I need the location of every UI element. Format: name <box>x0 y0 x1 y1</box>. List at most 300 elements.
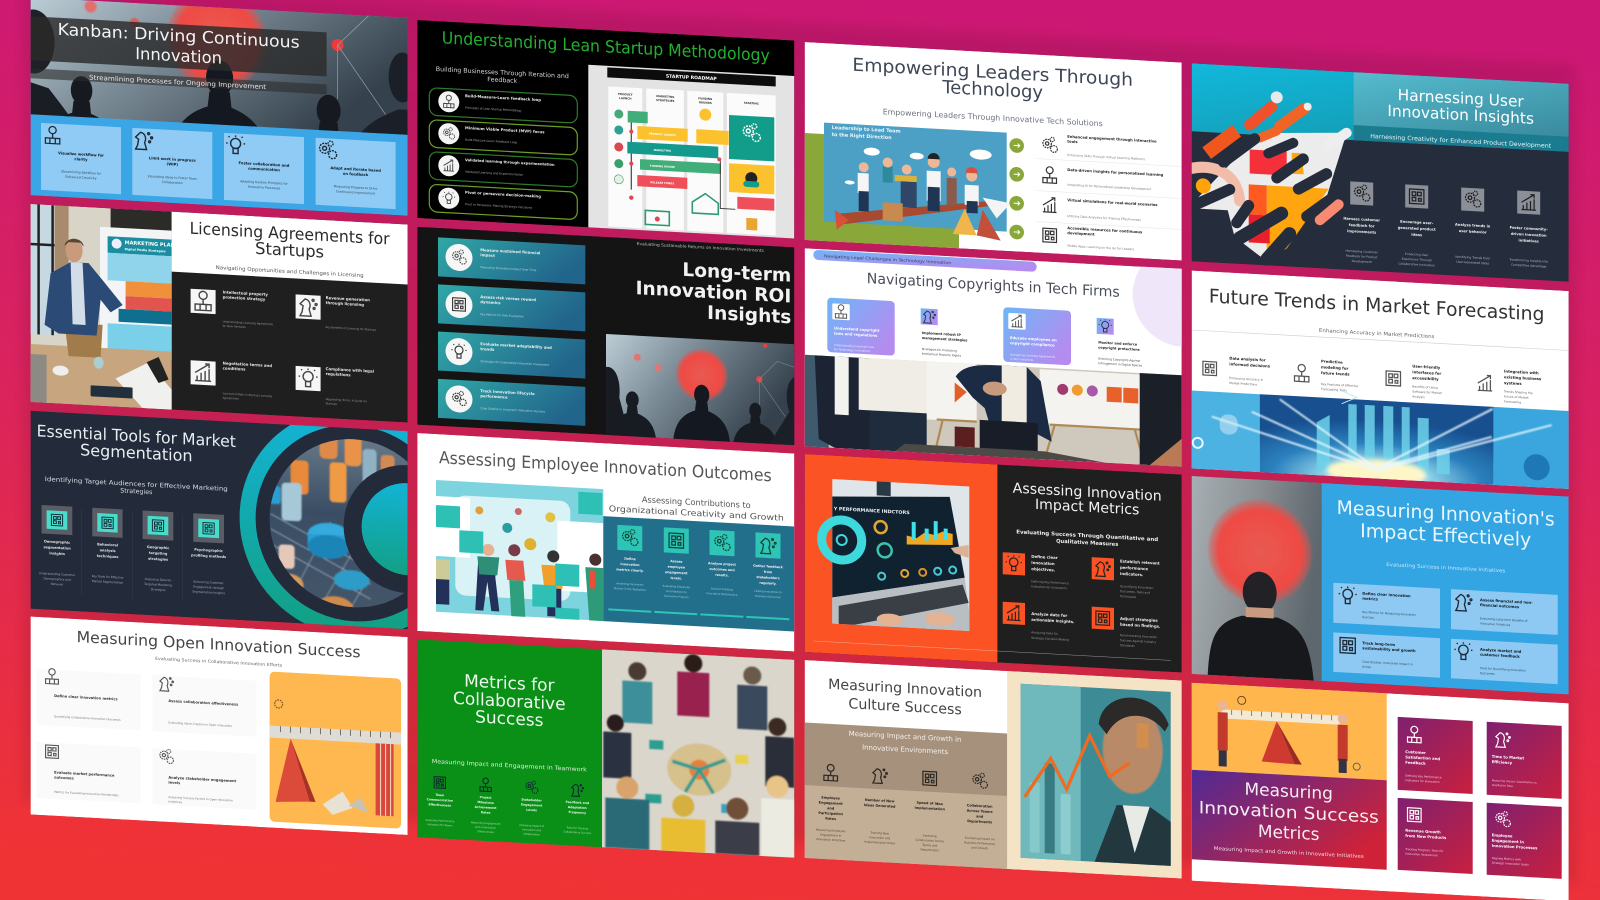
metric: feedback frequency: Collaborative Success <box>564 830 592 835</box>
title: Innovation ROI <box>636 278 791 308</box>
title: Navigating Copyrights in Tech Firms <box>867 271 1120 301</box>
card: educate employees: Educate employees on <box>1010 336 1057 343</box>
item: adjust strategies: Success Against Industry <box>1120 638 1156 644</box>
slide: Licensing Agreements for Startups <box>31 204 408 423</box>
item: accessible resources: Accessible resources for continuous <box>1067 226 1143 234</box>
tool: demographic: Demographics and <box>43 576 71 582</box>
item: define objectives: Defining Key Performance <box>1031 579 1069 585</box>
item: interactive tools: Enhanced engagement through interactive <box>1067 135 1157 144</box>
tool: psychographic: Engagement through <box>193 585 224 590</box>
item: integration: Trends Shaping the <box>1503 389 1533 395</box>
card: adapt and iterate <box>316 138 396 209</box>
lower tan panel <box>805 785 1007 869</box>
photo: analytics pegs in circle <box>266 425 446 626</box>
subtitle: Empowering Leaders Through Innovative Tech Solutions <box>883 107 1103 128</box>
slide: Measuring Innovation Success Metrics <box>1192 683 1569 900</box>
column: foster community: Foster community- <box>1510 226 1548 232</box>
item: interactive tools <box>1042 135 1156 160</box>
item: risk vs reward: dynamics <box>480 299 501 305</box>
metric: project milestone: Rates <box>481 810 491 815</box>
box: sustainability: Action <box>1362 665 1372 669</box>
tile: customer satisfaction: Customer <box>1405 749 1426 755</box>
column: encourage ideas: Encourage user- <box>1400 220 1434 225</box>
tool: demographic: insights <box>49 551 65 556</box>
metric: define: Metrics in the Workplace <box>614 586 646 592</box>
item: adjust strategies: Benchmarking Innovation <box>1120 633 1157 639</box>
metric: team communication: Effectiveness <box>429 802 451 808</box>
item: data-driven insights: Data-driven insights for personalized learning <box>1067 168 1164 177</box>
box: financial outcomes: Innovative Initiatives <box>1480 621 1511 627</box>
startup roadmap board: PRODUCT <box>618 92 633 97</box>
column: encourage ideas: Collaborative Innovation <box>1398 262 1435 268</box>
item: accessible resources: development <box>1067 231 1095 237</box>
item: compliance: regulations <box>326 371 351 377</box>
metric: new ideas: Tracking New <box>869 831 890 836</box>
subtitle: Navigating Opportunities and Challenges in Licensing <box>216 265 364 279</box>
title: Assessing Employee Innovation Outcomes <box>439 447 772 485</box>
startup roadmap board: FUNDING <box>698 96 712 101</box>
item: risk vs reward <box>438 284 585 331</box>
list item 2 <box>429 120 577 155</box>
list item 1: Principles of Lean Startup Methodology <box>465 106 522 113</box>
box: financial outcomes: financial outcomes <box>1480 603 1520 609</box>
box: market feedback: Outcomes <box>1480 671 1495 676</box>
column: analyze trends: Analyze trends in <box>1455 223 1491 229</box>
metric: assess <box>663 527 690 599</box>
arrow bullet 3 <box>1009 196 1024 211</box>
title: Understanding Lean Startup Methodology <box>442 27 770 65</box>
startup roadmap board: RELEASE FUNDS <box>650 180 674 185</box>
list item 3: Validated Learning and Experimentation <box>465 170 523 177</box>
item: integration: Integration with <box>1504 368 1539 375</box>
item: predictive modeling: Forecasting Tools <box>1321 387 1347 392</box>
metric: analyze <box>707 530 738 597</box>
tool: demographic: Understanding Customer <box>39 571 76 577</box>
subtitle: Measuring Impact and Growth in Innovative Initiatives <box>1214 846 1364 860</box>
tile: customer satisfaction <box>1398 717 1473 794</box>
metric: stakeholder engagement: Levels <box>526 808 537 812</box>
item: IP strategy: Intellectual property <box>223 289 268 297</box>
title: Startups <box>255 239 324 262</box>
item: define metrics: Quantifying Collaborative Innovation Outcomes <box>54 714 121 722</box>
metric: feedback frequency: Tools for Tracking <box>567 825 589 831</box>
metric: team communication: Team <box>435 793 444 797</box>
item: accessible resources: Mobile Apps: Learning on the Go for Leaders <box>1067 244 1134 251</box>
startup roadmap board: STRATEGIES <box>656 98 675 103</box>
slide: Assessing Employee Innovation Outcomes <box>417 433 794 652</box>
column: analyze trends: user behavior <box>1459 229 1487 235</box>
item: user-friendly interfaces: interfaces for <box>1412 369 1441 376</box>
startup roadmap board <box>588 65 794 239</box>
metric: employee engagement: Employee <box>821 796 841 801</box>
metric: feedback frequency: Feedback and <box>566 800 589 805</box>
metric: stakeholder engagement <box>519 780 544 837</box>
card: visualize workflow <box>41 123 121 194</box>
metrics panel <box>603 516 794 632</box>
decorative pale circle <box>1133 244 1233 350</box>
metric: project milestone: Effectiveness <box>477 829 495 834</box>
item: negotiation: Negotiation terms and <box>223 360 272 368</box>
illustration: team on arrow <box>824 123 1011 241</box>
card: visualize workflow: Enhanced Creativity <box>65 175 97 180</box>
metric: project milestone: and Contribution <box>475 825 497 830</box>
metric: feedback frequency: Adaptation <box>568 805 587 810</box>
card: limit WIP: Collaboration <box>162 180 183 185</box>
column: foster community: driven innovation <box>1511 232 1547 238</box>
item: compliance <box>296 364 374 408</box>
card: understand copyright: Understanding Copyright Law <box>834 343 875 349</box>
item: integration: existing business <box>1504 374 1542 381</box>
arrow bullet 4 <box>1009 224 1024 240</box>
card: adapt and iterate: Measuring Progress to Drive <box>334 184 377 191</box>
tool: behavioral: Behavioral <box>97 542 118 547</box>
item: user-friendly interfaces: Analysis <box>1412 395 1425 399</box>
item: compliance: Compliance with legal <box>326 366 374 374</box>
tile: employee engagement <box>1487 803 1562 879</box>
metric: team communication <box>425 776 455 828</box>
illustration: team handshake <box>436 480 603 621</box>
item: establish indicators <box>1092 557 1160 600</box>
item: analyze data <box>1003 602 1075 642</box>
metric: collaboration: Across Teams <box>967 809 993 814</box>
item: analyze data: actionable insights. <box>1031 617 1075 624</box>
metric: new ideas <box>864 768 896 845</box>
title: Essential Tools for Market <box>37 421 236 451</box>
box: market feedback <box>1451 639 1558 684</box>
subtitle strip <box>1354 125 1569 152</box>
metric: gather: from <box>764 570 773 574</box>
metric: gather: regularly. <box>759 581 777 586</box>
metric: employee engagement: Innovation Initiatives <box>816 837 846 843</box>
card: adapt and iterate: Continuous Improvement <box>336 189 376 196</box>
tool: psychographic: profiling methods <box>191 553 226 559</box>
title: Measuring <box>1245 780 1333 804</box>
metric: assess: levels. <box>670 576 682 581</box>
subtitle: Identifying Target Audiences for Effective Marketing <box>45 476 228 493</box>
item: negotiation: Common Pitfalls in Startup Licensing <box>223 391 272 398</box>
metric: speed of implementation: Departments <box>921 847 939 852</box>
box: financial outcomes <box>1451 589 1558 635</box>
box: financial outcomes: Assess financial and non- <box>1480 598 1533 605</box>
item: accessible resources <box>1042 226 1142 250</box>
title area <box>172 212 408 285</box>
title: Metrics for <box>464 671 555 696</box>
item: IP management <box>921 308 967 358</box>
title: Insights <box>707 303 791 328</box>
box: sustainability: Case Studies: Innovation Impact in <box>1362 660 1413 666</box>
item: stakeholder engagement: Assessing Success Factors in Open Innovation <box>168 795 233 803</box>
item: financial impact <box>438 237 585 284</box>
metric: define: Assessing Innovation <box>616 581 644 587</box>
item: monitor and enforce: copyright protections <box>1098 346 1140 352</box>
subtitle: Qualitative Measures <box>1056 539 1118 548</box>
item: integration: Forecasting <box>1504 399 1521 404</box>
item: data-driven insights: Integrating AI for Personalized Leadership Development <box>1067 183 1152 191</box>
subtitle: Innovative Environments <box>862 743 948 756</box>
dark inner ring and teal disc <box>344 462 472 597</box>
tool: demographic: Demographic <box>44 539 70 545</box>
box: clear metrics <box>1333 583 1440 629</box>
subtitle: Evaluating Success in Collaborative Innovation Efforts <box>155 656 282 668</box>
item: integration: Future of Market <box>1504 394 1529 400</box>
column: encourage ideas: generated product <box>1398 226 1436 232</box>
title: Technology <box>941 77 1043 103</box>
list item 3: Validated learning through experimentation <box>465 158 555 167</box>
slide: Assessing Innovation Impact Metrics <box>805 454 1182 673</box>
item: predictive modeling: modeling for <box>1321 364 1348 371</box>
startup roadmap board: MARKETING <box>656 94 674 99</box>
slide: Metrics for Collaborative Success <box>417 639 794 858</box>
metric: gather: stakeholders <box>756 575 780 580</box>
item: negotiation: conditions <box>223 365 246 372</box>
item: adaptability: Strategies for Sustainable Innovation Investment <box>480 359 550 367</box>
box: clear metrics: Success <box>1362 615 1374 620</box>
metric: analyze: Analyze project <box>708 561 736 567</box>
item: risk vs reward: Assess risk versus reward <box>480 294 536 302</box>
metric: stakeholder engagement: Stakeholder <box>521 797 542 803</box>
tool: behavioral <box>92 508 124 585</box>
item: IP management: Implement robust IP <box>922 331 961 337</box>
column: encourage ideas: Enhancing User <box>1405 252 1429 257</box>
metric: team communication: Assessing Performance <box>425 818 455 823</box>
tool: geographic: Analyzing Data for <box>145 577 172 582</box>
card: understand copyright: laws and regulations <box>834 332 878 338</box>
list item 4: Pivot or persevere decision-making <box>465 190 541 199</box>
item: IP strategy: Understanding Licensing Agreements <box>223 319 274 326</box>
item: collaboration effectiveness: Evaluating Value Creation in Open Innovation <box>168 720 232 728</box>
item: establish indicators: Outcomes, Tools and <box>1120 589 1150 595</box>
subtitle: Feedback <box>487 76 518 85</box>
startup roadmap board: PRODUCT LAUNCH <box>649 132 676 137</box>
metric: define: metrics clearly. <box>616 567 644 573</box>
top pill banner <box>813 250 1037 272</box>
item: adjust strategies: based on findings. <box>1120 622 1161 629</box>
card: understand copyright: Understand copyright <box>834 326 880 333</box>
title: Measuring Innovation <box>828 677 982 701</box>
card: foster collaboration: communication <box>248 167 280 172</box>
column: foster community: initiatives <box>1519 238 1539 244</box>
tool: psychographic: Enhancing Customer <box>194 580 224 585</box>
cyan header <box>1192 63 1569 152</box>
tile: revenue growth: Innovation Assessment <box>1405 852 1439 857</box>
item: market performance: Evaluate market performance <box>54 770 115 778</box>
subtitle: Harnessing Creativity for Enhanced Product Development <box>1370 134 1552 150</box>
metric: stakeholder engagement: Collaboration <box>523 832 540 837</box>
title: Collaborative <box>453 689 566 715</box>
slide: Understanding Lean Startup Methodology <box>417 20 794 239</box>
item: IP strategy: for New Ventures <box>223 324 246 329</box>
tile: customer satisfaction: Defining Key Performance <box>1405 774 1442 780</box>
item: define objectives: Define clear <box>1031 554 1058 560</box>
tile: customer satisfaction: Indicators for Innovation <box>1405 778 1440 784</box>
list item 2: Build-Measure-Learn Feedback Loop <box>465 138 517 144</box>
tan panel <box>805 722 1007 869</box>
item: establish indicators: Quantifying Innovation: <box>1120 584 1154 590</box>
metric: new ideas: Implementation Rates <box>864 840 896 845</box>
item: stakeholder engagement <box>153 748 257 810</box>
gradient title panel <box>1192 770 1387 870</box>
photo: presenter with marketing plan banner: Digital Media Strategies <box>125 247 166 253</box>
metric: team communication: Indicators for Teams <box>427 822 453 828</box>
item: market performance: outcomes <box>54 775 74 781</box>
slide: Measuring Innovation's Impact Effectively <box>1192 476 1569 695</box>
metric: new ideas: Innovation and <box>869 835 890 840</box>
column: harness feedback: Feedback for Product <box>1346 254 1378 259</box>
title: Measuring Open Innovation Success <box>77 628 361 661</box>
item: negotiation: Agreements <box>223 396 240 401</box>
tool: behavioral: Market Segmentation <box>92 579 123 585</box>
subtitle: Building Businesses Through Iteration and <box>436 66 569 80</box>
item: monitor and enforce: Infringement in Digital Spaces <box>1098 361 1143 368</box>
card: limit WIP <box>132 128 212 199</box>
startup roadmap board: STARTING <box>744 101 759 106</box>
column: harness feedback: Harnessing Customer <box>1346 249 1379 254</box>
item: IP strategy: protection strategy <box>223 294 266 302</box>
card: foster collaboration <box>224 133 304 204</box>
item: user-friendly interfaces: Software for Market <box>1412 390 1443 395</box>
box: clear metrics: Key Metrics for Measuring Innovation <box>1362 610 1416 617</box>
photo: laptop with KPI dashboard: Y PERFORMANCE INDCTORS <box>833 506 910 516</box>
item: user-friendly interfaces: accessibility <box>1412 375 1439 382</box>
column: foster community: Transforming Insights into <box>1508 258 1548 264</box>
tool: demographic: Behavior <box>51 582 64 587</box>
subtitle: Evaluating Success in Innovative Initiatives <box>1386 562 1506 574</box>
card: visualize workflow: Streamlining Workflow for <box>61 169 102 176</box>
tool: geographic: Strategies <box>151 587 166 592</box>
photo: audience and red brain <box>606 334 794 450</box>
item: define objectives: objectives. <box>1031 566 1056 572</box>
metric: assess: Evaluating Employee <box>663 584 690 589</box>
orange side panel <box>805 454 997 662</box>
card: visualize workflow: Visualize workflow for <box>58 151 104 158</box>
metric: gather: Gather feedback <box>753 564 784 569</box>
green accent block <box>805 133 959 248</box>
item: predictive modeling: Predictive <box>1321 359 1343 365</box>
tile: revenue growth: Revenue Growth <box>1405 828 1441 835</box>
item: establish indicators: performance <box>1120 565 1148 571</box>
card: limit WIP: Limit work in progress <box>149 156 196 163</box>
box: market feedback: customer feedback <box>1480 653 1520 659</box>
item: stakeholder engagement: Analyze stakeholder engagement <box>168 776 237 783</box>
box: sustainability: Track long-term <box>1362 641 1395 647</box>
metric: collaboration: Departments <box>967 819 992 824</box>
item: revenue generation <box>296 293 377 332</box>
metric: speed of implementation: Teams and <box>921 843 937 848</box>
item: financial impact: Measure sustained financial <box>480 247 540 255</box>
title: Harnessing User <box>1398 86 1524 111</box>
metric: speed of implementation: Speed of Idea <box>917 801 944 806</box>
box: sustainability: sustainability and growth <box>1362 646 1416 653</box>
item: lifecycle: Case Studies in Long-term Innovation Success <box>480 406 545 414</box>
title: Future Trends in Market Forecasting <box>1209 285 1544 326</box>
title: Long-term <box>682 260 791 287</box>
metric: define <box>614 525 646 592</box>
image: man with growth chart <box>1021 684 1171 866</box>
title band <box>31 16 327 76</box>
item: compliance: Startups <box>326 401 338 406</box>
metric: stakeholder engagement: Engagement <box>521 802 543 808</box>
metric: collaboration: Evaluating Impact on <box>965 836 995 841</box>
illustration: ruler and triangle <box>270 672 401 829</box>
card: educate employees: Navigating Licensing Agreements <box>1010 352 1056 359</box>
photo: laptop with KPI dashboard <box>822 478 969 631</box>
item: data analysis <box>1203 354 1271 387</box>
card: adapt and iterate: Adapt and iterate based <box>330 166 381 173</box>
metric: feedback frequency: Frequency <box>569 810 586 815</box>
column: harness feedback <box>1343 181 1380 265</box>
item: market performance <box>37 742 141 803</box>
box: financial outcomes: Evaluating Long-term Benefits of <box>1480 616 1529 623</box>
title: Licensing Agreements for <box>190 219 390 249</box>
item: user-friendly interfaces: Benefits of Using <box>1412 385 1438 390</box>
column: foster community: Competitive Advantage <box>1511 263 1547 269</box>
metric: analyze: Innovative Performance <box>707 591 738 597</box>
box: market feedback: Tools for Quantifying Innovation <box>1479 666 1526 673</box>
item: lifecycle <box>438 379 585 426</box>
tool: psychographic <box>191 513 226 595</box>
metric: team communication: Communication <box>427 797 453 803</box>
card: adapt and iterate: on feedback <box>343 172 369 177</box>
abstract diagonal art <box>1192 87 1347 270</box>
top pill banner: Navigating Legal Challenges in Technology Innovation <box>824 253 952 265</box>
title: Innovation Insights <box>1387 102 1534 128</box>
metric: project milestone: Achievement <box>475 805 497 810</box>
item: integration: systems <box>1504 380 1522 386</box>
photo: presenter with marketing plan banner: MARKETING PLAN <box>125 240 175 249</box>
item: predictive modeling: Key Features of Effective <box>1321 382 1358 388</box>
tile: time to market <box>1487 722 1562 799</box>
metric: assess: Assess <box>670 559 683 564</box>
title: Assessing Innovation <box>1013 481 1162 505</box>
column: harness feedback: feedback for <box>1349 223 1375 228</box>
illustration: team on arrow: to the Right Direction <box>832 132 892 141</box>
tile: employee engagement: Engagement in <box>1492 838 1524 844</box>
metric: speed of implementation: Assessing <box>923 833 937 838</box>
card: foster collaboration: Adapting Kanban Principles for <box>240 179 288 186</box>
slide: Navigating Copyrights in Tech Firms <box>805 226 1233 470</box>
metric: assess: engagement <box>665 570 688 575</box>
slide: Measuring Innovation Culture Success <box>805 660 1182 879</box>
tool: behavioral: analysis <box>100 548 116 553</box>
title second line: Innovation <box>135 44 222 68</box>
item: monitor and enforce <box>1097 318 1143 368</box>
metric: analyze: outcomes and <box>709 567 735 572</box>
slide: Long-term Innovation ROI Insights <box>417 227 794 450</box>
metric: define: Define <box>624 557 636 561</box>
subtitle: Enhancing Accuracy in Market Predictions <box>1319 328 1435 340</box>
list item 1 <box>429 88 577 123</box>
title: Empowering Leaders Through <box>852 55 1133 91</box>
item: adaptability <box>438 332 585 379</box>
tile: employee engagement: Strategic Innovation Goals <box>1492 861 1529 867</box>
title: Innovation Success <box>1199 798 1379 828</box>
item: monitor and enforce: Enforcing Copyrights Against <box>1098 357 1141 363</box>
item: negotiation <box>191 359 272 402</box>
metric: employee engagement: Engagement in <box>820 833 842 838</box>
illustration: team on arrow: Leadership to Lead Team <box>832 125 901 135</box>
title: Impact Effectively <box>1360 520 1531 551</box>
item: compliance: Negotiating Terms: A Guide for <box>326 397 368 403</box>
tile: employee engagement: Aligning Metrics with <box>1492 856 1521 862</box>
photo: presenter with marketing plan banner <box>31 204 175 410</box>
card: visualize workflow: clarity <box>74 157 88 162</box>
item: analyze data: Analyze data for <box>1031 611 1067 618</box>
startup roadmap board: STARTUP ROADMAP <box>666 74 717 82</box>
teal ring <box>248 412 460 635</box>
item: establish indicators: Techniques <box>1119 594 1137 599</box>
item: market performance: Metrics for Evaluating Innovation Partnerships <box>54 790 119 797</box>
item: interactive tools: Enhancing Skills Through Virtual Learning Platforms <box>1067 153 1145 161</box>
